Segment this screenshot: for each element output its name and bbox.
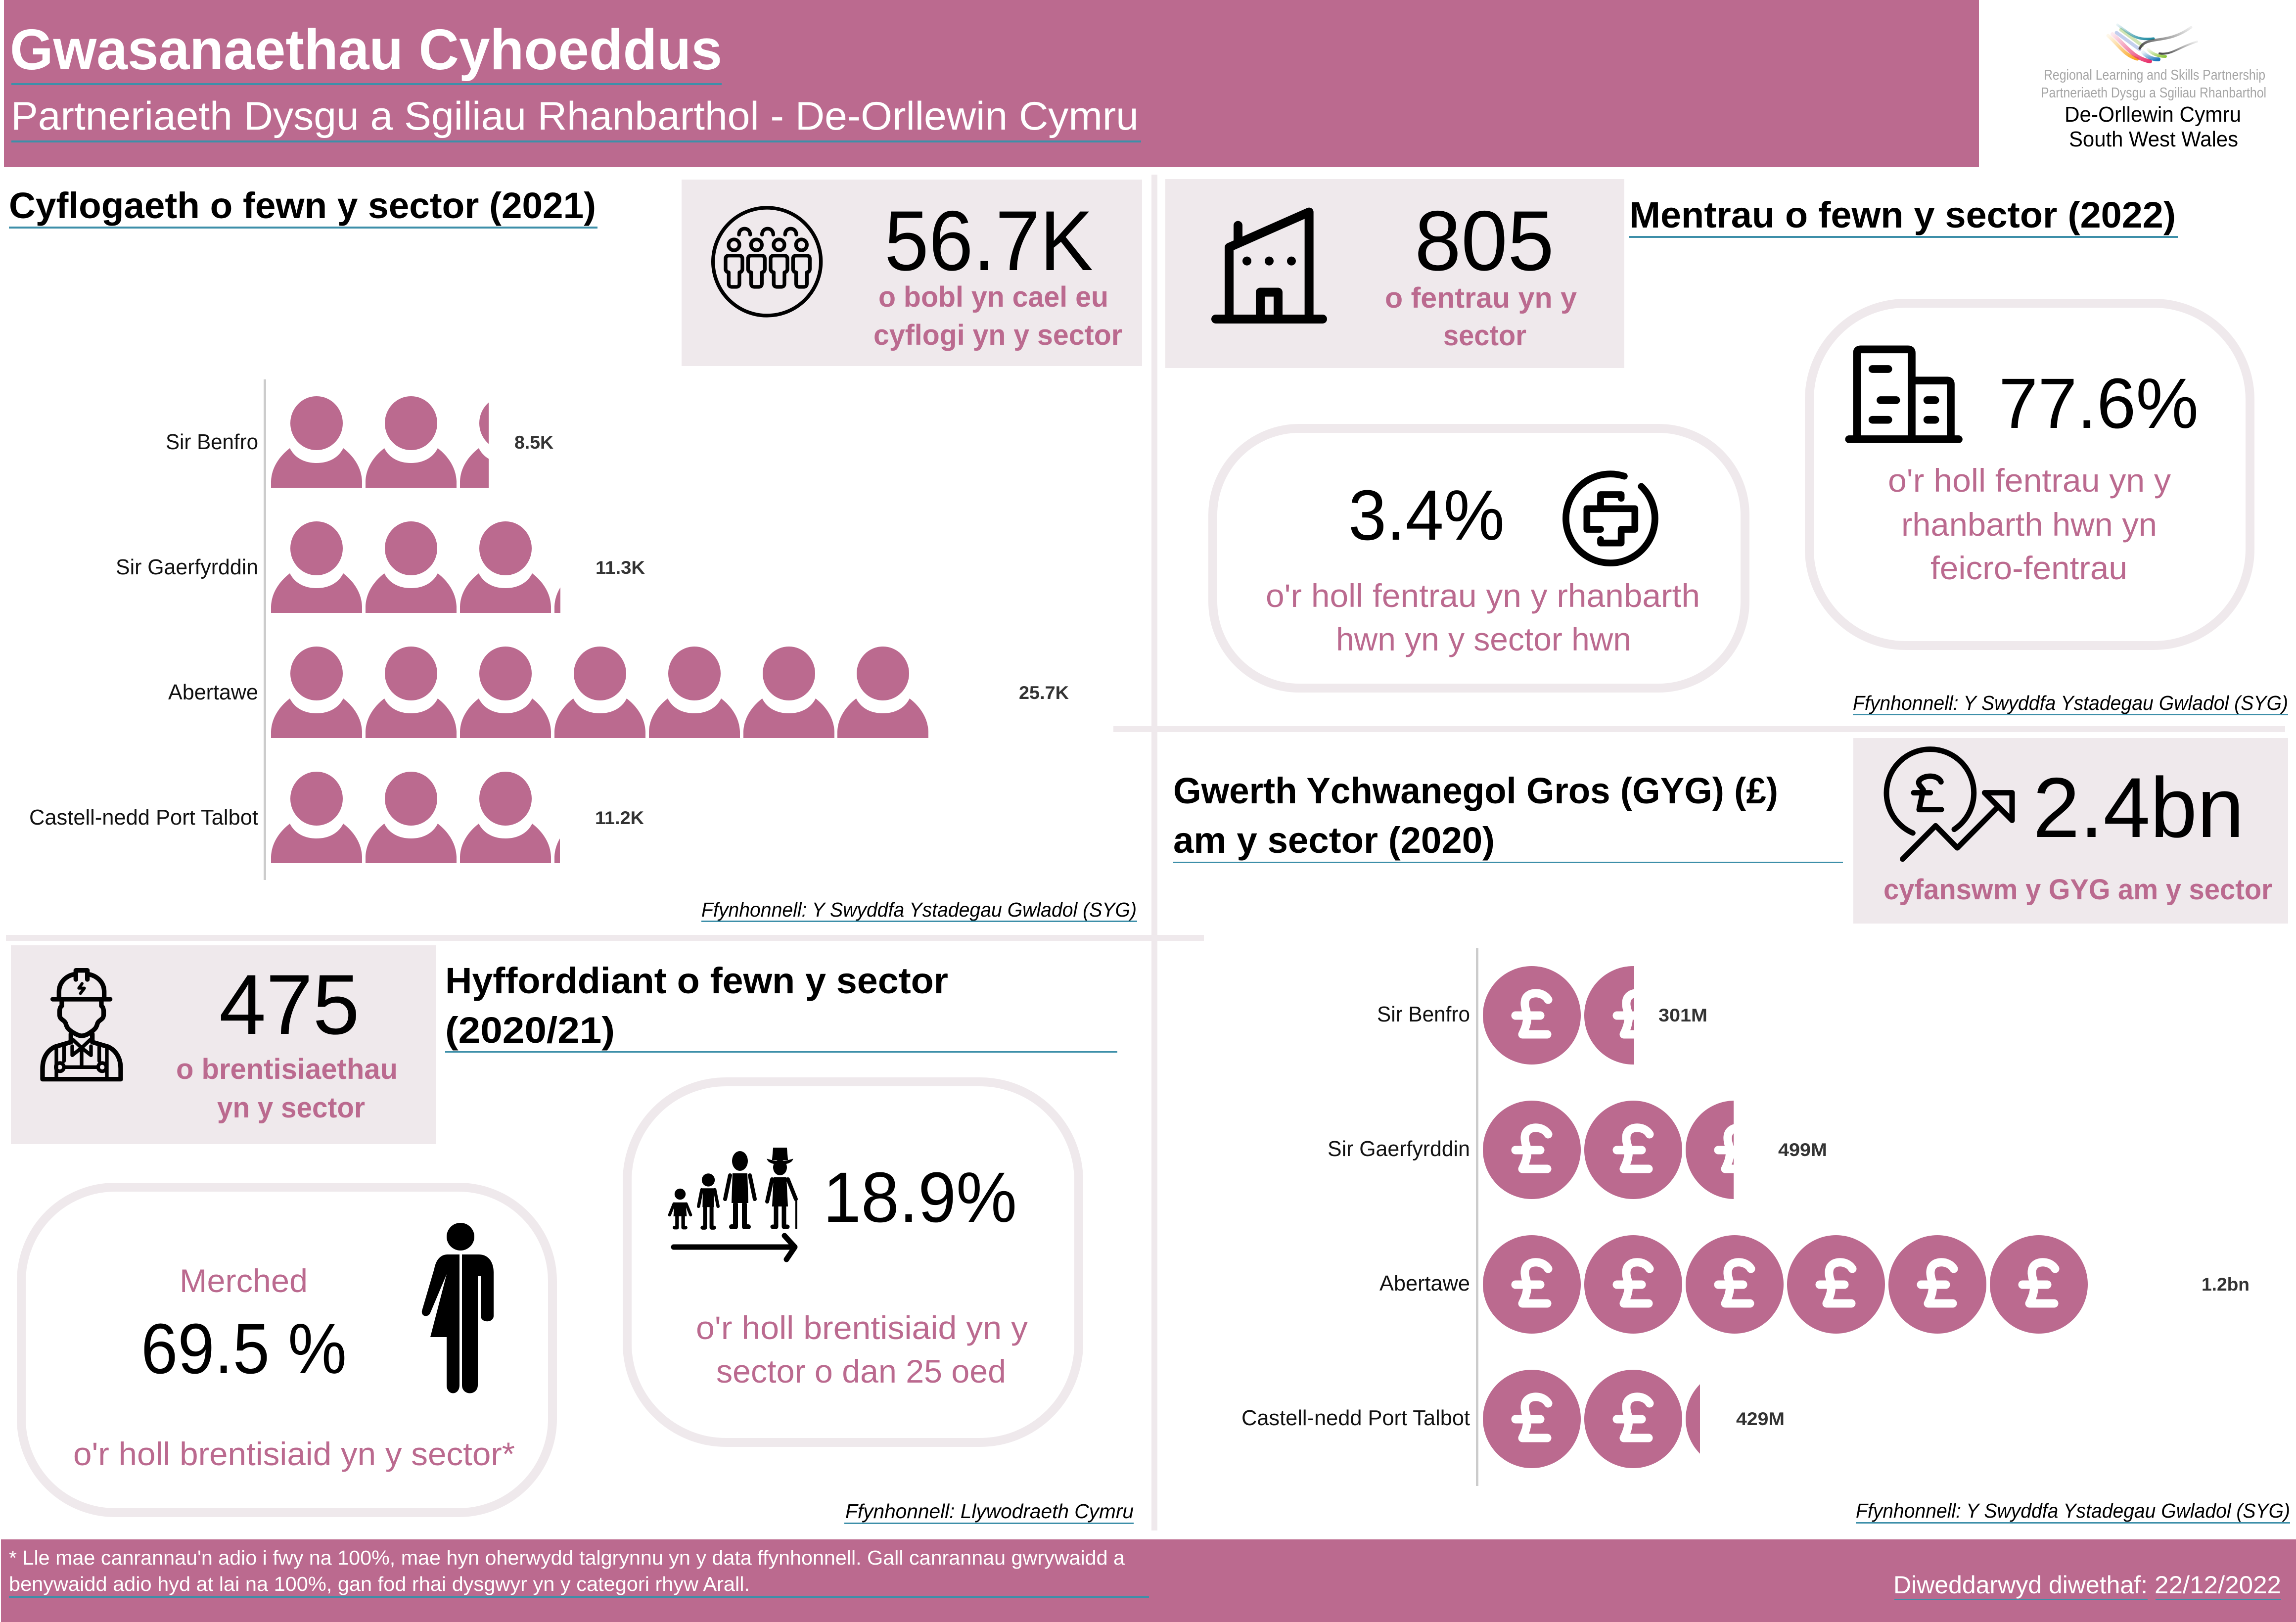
row: Abertawe — [1379, 1235, 2250, 1334]
last updated — [1893, 1571, 2281, 1600]
caption — [873, 281, 1122, 351]
number: 3.4% — [1348, 475, 1505, 555]
icon: group of people in circle — [713, 208, 821, 316]
footnote: * Lle mae canrannau'n adio i fwy na 100%, mae hyn oherwydd talgrynnu yn y data ffynhonnell. Gall canrannau gwrywaidd a — [9, 1546, 1125, 1569]
caption: yn y sector — [217, 1092, 365, 1124]
panel: micro enterprises share — [1809, 303, 2250, 646]
panel: employment KPI — [682, 180, 1142, 366]
caption: o'r holl brentisiaid yn y sector* — [73, 1436, 515, 1472]
caption: o brentisiaethau — [176, 1053, 398, 1085]
title: Gwasanaethau Cyhoeddus — [10, 17, 722, 82]
caption — [1888, 462, 2171, 586]
number: 2.4bn — [2033, 760, 2244, 855]
chart: GVA by county — [1241, 948, 2250, 1486]
row: Castell-nedd Port Talbot: Castell-nedd Port Talbot — [1241, 1406, 1470, 1430]
panel: under 25 apprentices — [627, 1082, 1079, 1442]
row: Sir Gaerfyrddin: 499M — [1778, 1140, 1827, 1160]
row: Castell-nedd Port Talbot: 429M — [1736, 1409, 1785, 1429]
caption — [176, 1053, 398, 1124]
icon: people of increasing age with arrow — [670, 1148, 796, 1259]
caption: cyflogi yn y sector — [873, 319, 1122, 351]
row: Sir Benfro: Sir Benfro — [166, 430, 258, 454]
row: Sir Benfro — [166, 396, 553, 488]
heading: training: Hyfforddiant o fewn y sector — [445, 960, 948, 1001]
caption — [1266, 577, 1700, 657]
logo text: De-Orllewin Cymru — [2065, 102, 2241, 127]
row: Sir Gaerfyrddin: Sir Gaerfyrddin — [116, 555, 258, 579]
icon: factory building — [1216, 212, 1323, 319]
icon: office buildings — [1849, 349, 1959, 439]
panel: enterprises KPI — [1165, 179, 1624, 368]
number: 475 — [219, 957, 360, 1052]
logo: South West Wales Regional Learning and Skills Partnership — [2041, 25, 2266, 151]
row: Castell-nedd Port Talbot — [1241, 1370, 1785, 1468]
caption: o'r holl brentisiaid yn y — [696, 1309, 1028, 1346]
icon: electrician worker — [43, 971, 121, 1079]
caption: feicro-fentrau — [1930, 550, 2127, 586]
panel: GVA KPI — [1853, 738, 2288, 924]
number: 56.7K — [884, 193, 1093, 288]
footer banner — [1, 1539, 2296, 1622]
row: Abertawe: Abertawe — [168, 680, 258, 704]
icon: ribbon hands — [2108, 25, 2197, 61]
caption: o'r holl fentrau yn y — [1888, 462, 2171, 499]
label: Merched — [180, 1262, 308, 1299]
row: Sir Benfro — [1377, 966, 1707, 1065]
row: Castell-nedd Port Talbot: 11.2K — [595, 808, 644, 828]
header banner — [4, 0, 1979, 167]
footnote: benywaidd adio hyd at lai na 100%, gan fod rhai dysgwyr yn y categori rhyw Arall. — [9, 1573, 750, 1595]
row: Abertawe — [168, 647, 1069, 738]
subtitle: Partneriaeth Dysgu a Sgiliau Rhanbarthol - De-Orllewin Cymru — [11, 94, 1139, 139]
row: Abertawe: 1.2bn — [2202, 1274, 2250, 1295]
caption: sector — [1443, 320, 1526, 352]
chart: employment by county — [29, 379, 1069, 880]
caption — [1385, 282, 1577, 352]
row: Castell-nedd Port Talbot — [29, 772, 645, 863]
panel: women apprentices — [21, 1187, 552, 1513]
row: Sir Gaerfyrddin — [1328, 1101, 1827, 1199]
row: Sir Benfro: 301M — [1658, 1005, 1707, 1025]
panel: regional enterprises share — [1213, 428, 1745, 688]
row: Sir Benfro: Sir Benfro — [1377, 1002, 1470, 1026]
panel: apprenticeships KPI — [11, 945, 436, 1144]
heading: enterprises: Mentrau o fewn y sector (2022) — [1629, 194, 2176, 235]
icon: pound growth arrow — [1886, 749, 2012, 859]
row: Sir Benfro: 8.5K — [514, 432, 553, 453]
row: Abertawe: Abertawe — [1379, 1271, 1470, 1296]
logo text: Regional Learning and Skills Partnership — [2044, 67, 2265, 83]
caption — [696, 1309, 1028, 1390]
row: Sir Gaerfyrddin: 11.3K — [596, 557, 645, 578]
icon: half woman half man figure — [422, 1223, 494, 1393]
row: Castell-nedd Port Talbot: Castell-nedd Port Talbot — [29, 805, 258, 830]
source: employment: Ffynhonnell: Y Swyddfa Ystadegau Gwladol (SYG) — [701, 898, 1137, 921]
last updated: 22/12/2022 — [2155, 1571, 2281, 1599]
heading: training: (2020/21) — [445, 1010, 615, 1051]
caption: hwn yn y sector hwn — [1336, 621, 1631, 657]
last updated: Diweddarwyd diwethaf: — [1893, 1571, 2148, 1599]
caption: rhanbarth hwn yn — [1901, 506, 2157, 543]
heading: GVA: am y sector (2020) — [1173, 820, 1495, 861]
heading: GVA — [1173, 770, 1843, 863]
source: enterprises: Ffynhonnell: Y Swyddfa Ystadegau Gwladol (SYG) — [1853, 692, 2288, 714]
heading: employment: Cyflogaeth o fewn y sector (2021) — [9, 185, 596, 226]
row: Sir Gaerfyrddin — [116, 521, 645, 613]
caption: o'r holl fentrau yn y rhanbarth — [1266, 577, 1700, 614]
footnote — [9, 1546, 1149, 1598]
source: training: Ffynhonnell: Llywodraeth Cymru — [845, 1500, 1134, 1523]
caption: o fentrau yn y — [1385, 282, 1577, 314]
logo text: South West Wales — [2069, 127, 2238, 151]
caption: o bobl yn cael eu — [878, 281, 1108, 313]
number: 77.6% — [1999, 364, 2199, 443]
number: 18.9% — [823, 1158, 1017, 1237]
heading: GVA: Gwerth Ychwanegol Gros (GYG) (£) — [1173, 770, 1778, 811]
caption: cyfanswm y GYG am y sector — [1883, 874, 2272, 906]
caption: sector o dan 25 oed — [716, 1353, 1006, 1390]
icon: cross in circle — [1566, 474, 1655, 563]
number: 805 — [1415, 193, 1554, 288]
row: Sir Gaerfyrddin: Sir Gaerfyrddin — [1328, 1137, 1470, 1161]
row: Abertawe: 25.7K — [1019, 683, 1069, 703]
heading: training — [445, 960, 1117, 1053]
logo text — [2041, 67, 2266, 151]
number: 69.5 % — [141, 1309, 347, 1389]
